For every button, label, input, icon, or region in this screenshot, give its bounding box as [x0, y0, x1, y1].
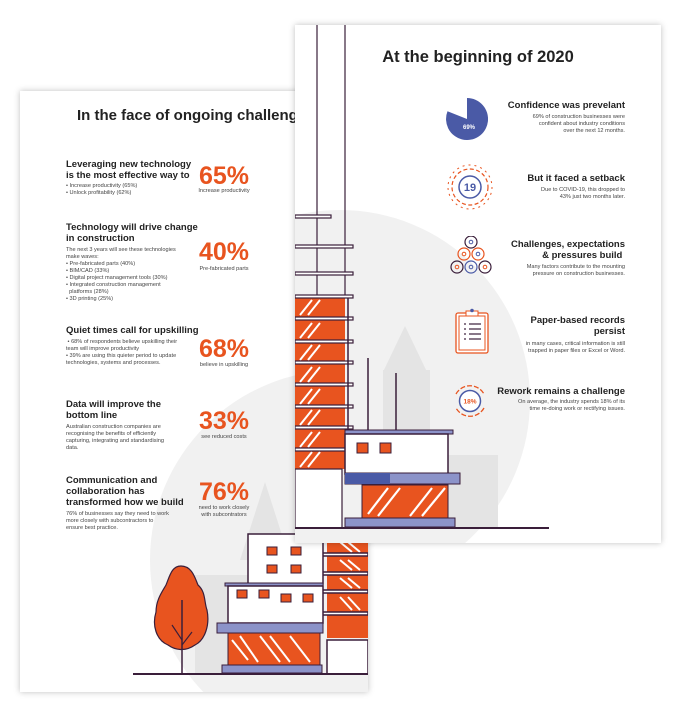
item: rework: Rework remains a challenge: [497, 386, 625, 397]
icon: pipes: [450, 236, 492, 274]
icon: rework 18%: 18%: [463, 398, 477, 406]
block: data: Australian construction companies are: [66, 424, 161, 430]
item: setback: 43% just two months later.: [560, 194, 625, 200]
item: paper: Paper-based records: [530, 315, 625, 326]
block: upskilling: • 39% are using this quieter period to update: [66, 353, 176, 359]
block: technology: • Unlock profitability (62%): [66, 190, 131, 196]
tower piece: [327, 538, 368, 638]
block: upskilling: technologies, systems and processes.: [66, 360, 161, 366]
block: upskilling: believe in upskilling: [200, 362, 248, 368]
block: upskilling: [66, 325, 249, 368]
item: confidence: over the next 12 months.: [563, 128, 625, 134]
icon: tree: [154, 566, 208, 675]
block: technology drive: make waves:: [66, 254, 99, 260]
block: technology: Leveraging new technology: [66, 159, 191, 170]
item: confidence: Confidence was prevelant: [508, 100, 625, 111]
item: rework: time re-doing work or rectifying issues.: [530, 406, 625, 412]
title left: In the face of ongoing challenges: [77, 107, 315, 124]
block: technology drive: • BIM/CAD (33%): [66, 268, 109, 274]
block: data: Data will improve the: [66, 399, 161, 410]
item: rework: [497, 386, 625, 412]
block: communication: transformed how we build: [66, 497, 184, 508]
block: communication: [66, 475, 250, 531]
block: technology: 65%: [199, 162, 249, 190]
block: technology drive: The next 3 years will see these technologies: [66, 247, 176, 253]
block: communication: 76% of businesses say they need to work: [66, 511, 169, 517]
block: technology drive: Technology will drive change: [66, 222, 198, 233]
block: data: [66, 399, 249, 451]
item: confidence: 69% of construction businesses were: [533, 114, 625, 120]
item: challenges: [511, 239, 625, 277]
block: technology: [66, 159, 250, 196]
item: paper: [526, 315, 625, 354]
block: technology drive: Pre-fabricated parts: [199, 266, 249, 272]
item: paper: persist: [594, 326, 625, 337]
panel: left page: [20, 91, 368, 692]
icon: pie 69%: 69%: [463, 125, 476, 131]
icon: virus 19: 19: [464, 182, 476, 194]
block: communication: Communication and: [66, 475, 157, 486]
block: technology drive: in construction: [66, 233, 135, 244]
block: upskilling: team will improve productivity: [66, 346, 139, 352]
block: communication: need to work closely: [199, 505, 249, 511]
item: challenges: pressure on construction businesses.: [533, 271, 625, 277]
block: technology drive: • Pre-fabricated parts (40%): [66, 261, 135, 267]
block: communication: collaboration has: [66, 486, 145, 497]
item: rework: On average, the industry spends 18% of its: [518, 399, 625, 405]
block: technology drive: • 3D printing (25%): [66, 296, 113, 302]
block: technology drive: • Digital project management tools (30%): [66, 275, 167, 281]
block: communication: more closely with subcontractors to: [66, 518, 153, 524]
block: technology drive: • Integrated construction management: [66, 282, 161, 288]
icon: clipboard: [455, 308, 489, 354]
title right: At the beginning of 2020: [382, 48, 574, 66]
background illustration right: [295, 25, 549, 543]
block: upskilling: 68%: [199, 335, 249, 363]
item: challenges: Many factors contribute to the mounting: [527, 264, 625, 270]
block: data: see reduced costs: [201, 434, 247, 440]
item: paper: trapped in paper files or Excel or Word.: [528, 348, 625, 354]
block: communication: with subcontrators: [201, 512, 247, 518]
block: communication: 76%: [199, 478, 249, 506]
block: technology drive: platforms (28%): [69, 289, 109, 295]
item: setback: [527, 173, 625, 200]
item: challenges: & pressures build: [542, 250, 622, 261]
block: data: 33%: [199, 407, 249, 435]
icon: virus 19: [448, 164, 492, 210]
item: confidence: [508, 100, 625, 134]
block: technology drive: [66, 222, 249, 302]
item: challenges: Challenges, expectations: [511, 239, 625, 250]
block: data: data.: [66, 445, 78, 451]
block: technology: Increase productivity: [198, 188, 250, 194]
block: data: capturing, integrating and standardising: [66, 438, 164, 444]
block: technology drive: 40%: [199, 238, 249, 266]
block: data: bottom line: [66, 410, 117, 421]
icon: rework 18%: [456, 385, 484, 417]
icon: pie 69%: [446, 98, 488, 140]
panel: right page: [295, 25, 661, 543]
item: setback: But it faced a setback: [527, 173, 625, 184]
item: setback: Due to COVID-19, this dropped to: [541, 187, 625, 193]
item: confidence: confident about industry conditions: [539, 121, 625, 127]
block: technology: is the most effective way to: [66, 170, 190, 181]
block: data: recognising the benefits of efficiently: [66, 431, 156, 437]
panel: left page: ensure best practice.: [66, 525, 118, 531]
block: technology: • Increase productivity (65%): [66, 183, 137, 189]
background illustration left: [133, 376, 368, 692]
item: paper: in many cases, critical information is still: [526, 341, 625, 347]
block: upskilling: • 68% of respondents believe upskilling their: [68, 339, 177, 345]
block: upskilling: Quiet times call for upskilling: [66, 325, 198, 336]
